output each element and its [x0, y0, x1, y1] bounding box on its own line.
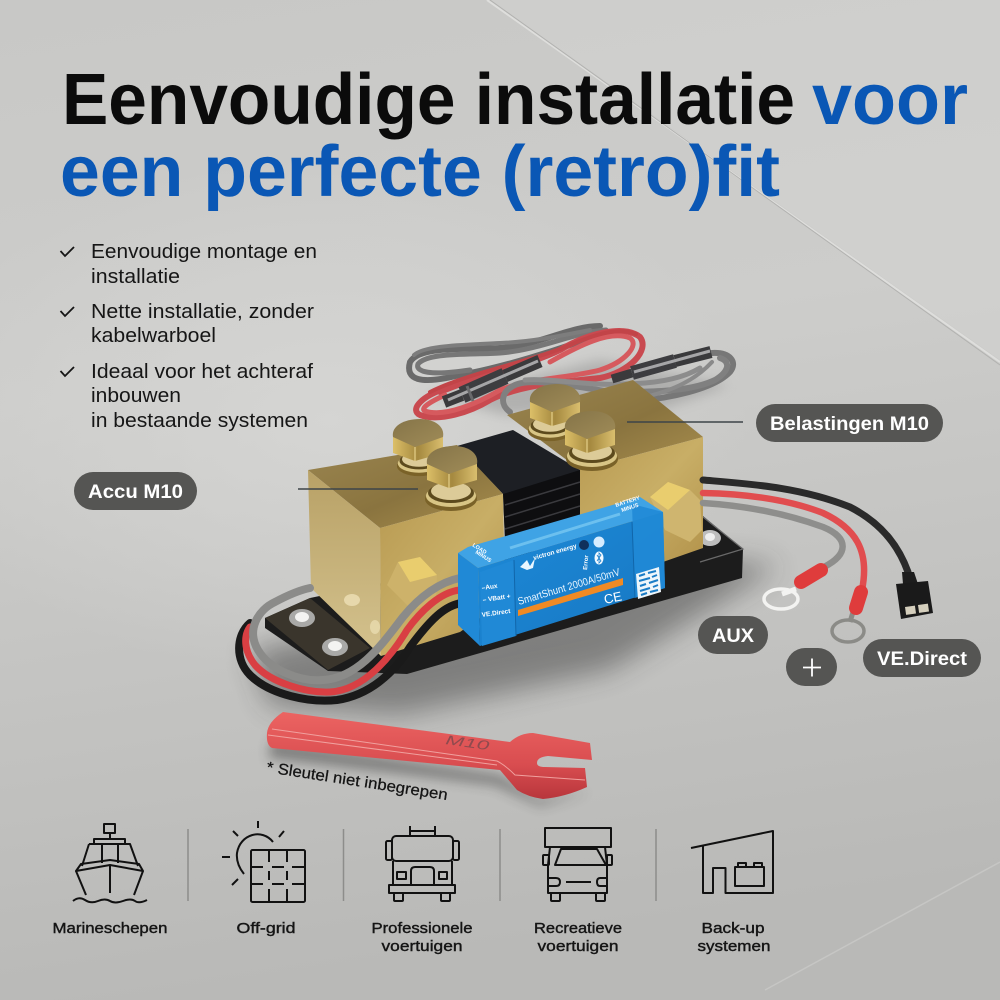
leader line: Belastingen — [627, 421, 743, 423]
label: AUX — [698, 616, 768, 654]
label: AUX: AUX — [712, 626, 754, 647]
bullet: nette installatie — [60, 301, 314, 347]
SmartShunt blue module — [458, 495, 665, 646]
fuse holders on sensor cables — [444, 351, 711, 402]
leader line: Accu — [298, 488, 418, 490]
icon: ship — [73, 824, 147, 902]
title: een perfecte (retro)fit — [60, 132, 780, 212]
module top labels: LOAD — [471, 543, 487, 556]
module side labels: –Aux — [481, 583, 498, 592]
shunt: mounting base plate — [265, 516, 743, 674]
shunt: left brass block — [308, 445, 505, 656]
model name: SmartShunt 2000A/50mV — [516, 566, 621, 608]
right gray coil — [503, 353, 733, 412]
drop shadows — [250, 560, 780, 806]
module side labels: – VBatt + — [482, 593, 511, 604]
victron logo — [520, 558, 535, 570]
label: Professionele voertuigen: Professionele — [372, 920, 472, 937]
icon: recreational vehicle — [543, 828, 612, 901]
label: Recreatieve voertuigen — [534, 920, 622, 955]
separator — [187, 829, 189, 901]
module top labels: MINUS — [621, 503, 640, 514]
shunt: right brass block — [507, 380, 703, 570]
wrench size marking: M10 — [445, 732, 492, 753]
module top labels — [471, 495, 641, 564]
label: Accu M10 — [74, 472, 197, 510]
left fuse holder — [444, 361, 540, 402]
label: VE.Direct — [863, 639, 981, 677]
status LEDs and bluetooth — [579, 536, 604, 570]
cables: right with terminals — [703, 480, 908, 590]
bullet: montage: Eenvoudige montage en — [91, 241, 317, 263]
label: Belastingen M10: Belastingen M10 — [770, 414, 929, 435]
VE.Direct connector — [896, 572, 933, 619]
module top labels: BATTERY — [615, 495, 641, 509]
module top labels: MINUS — [474, 550, 492, 564]
status LEDs and bluetooth: Error — [583, 554, 590, 570]
bullet: achteraf inbouwen: inbouwen — [91, 385, 181, 407]
label: Belastingen M10 — [756, 404, 943, 442]
label: Back-up systemen: systemen — [698, 938, 770, 955]
icon: building with battery — [691, 831, 773, 893]
bullet: montage — [60, 241, 317, 288]
title — [60, 60, 968, 212]
label: Back-up systemen — [698, 920, 770, 955]
cable shadow — [415, 360, 730, 415]
screw heads — [289, 530, 721, 656]
terminal bolts: right — [528, 384, 618, 471]
sector labels — [52, 920, 770, 955]
red coil — [416, 331, 643, 417]
bullet: achteraf inbouwen — [60, 361, 313, 432]
terminal bolts: left — [393, 419, 477, 511]
separator — [655, 829, 657, 901]
label: Accu M10: Accu M10 — [88, 482, 183, 503]
bullet: montage: installatie — [91, 266, 180, 288]
side bolts — [387, 482, 702, 610]
bullet: nette installatie: Nette installatie, zonder — [91, 301, 314, 323]
label: Off-grid: Off-grid — [236, 920, 296, 937]
module side labels: VE.Direct — [481, 608, 512, 619]
gray coil — [409, 326, 606, 380]
icon: professional truck — [386, 826, 459, 901]
label: Recreatieve voertuigen: Recreatieve — [534, 920, 622, 937]
bullet: nette installatie: kabelwarboel — [91, 325, 216, 347]
CE mark: CE — [603, 588, 624, 607]
shunt: black resistor fins between blocks — [457, 430, 580, 540]
label: VE.Direct: VE.Direct — [877, 649, 968, 670]
plus ring terminal — [832, 592, 864, 642]
bullet: achteraf inbouwen: in bestaande systemen — [91, 410, 308, 432]
coiled sensor cables behind shunt — [409, 326, 733, 417]
separator — [499, 829, 501, 901]
label: Recreatieve voertuigen: voertuigen — [538, 938, 618, 955]
AUX ring terminal — [764, 570, 821, 609]
bullet list — [60, 241, 317, 432]
QR code — [636, 567, 661, 599]
icon: solar panel with sun — [222, 821, 305, 902]
label: Marineschepen: Marineschepen — [52, 920, 168, 937]
cables: left loop — [239, 578, 462, 701]
orange bar — [518, 578, 623, 616]
title: voor — [812, 60, 968, 140]
label: Professionele voertuigen — [372, 920, 472, 955]
right fuse holder — [612, 351, 711, 379]
victron energy wordmark: victron energy — [533, 543, 578, 562]
label: plus — [786, 648, 837, 686]
red wrench — [267, 712, 592, 799]
wrench footnote: * Sleutel niet inbegrepen — [265, 759, 449, 804]
bullet: achteraf inbouwen: Ideaal voor het achteraf — [91, 361, 313, 383]
label: Professionele voertuigen: voertuigen — [382, 938, 462, 955]
label: Back-up systemen: Back-up — [702, 920, 764, 937]
separator — [342, 829, 344, 901]
title: Eenvoudige installatie — [62, 60, 795, 140]
module side labels — [481, 583, 512, 619]
